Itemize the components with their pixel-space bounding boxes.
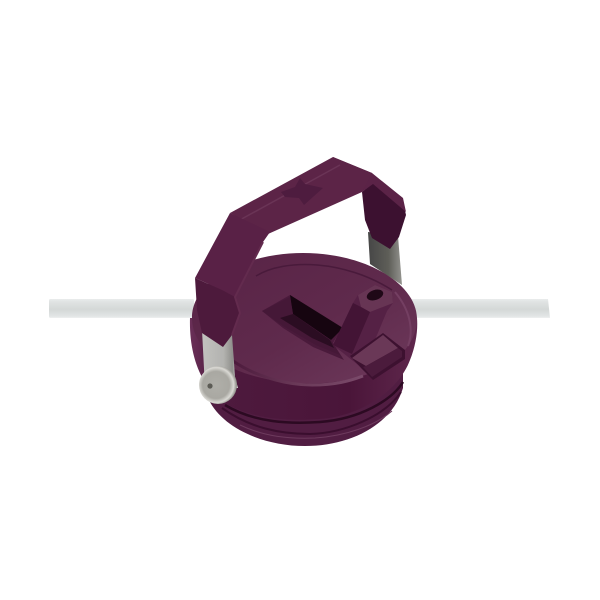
left metal strap: [202, 330, 238, 388]
lid side wall: [190, 318, 417, 423]
lid top face: [192, 253, 417, 385]
drink spout: [333, 285, 393, 368]
handle logo emboss: [281, 178, 323, 205]
handle top band: [230, 157, 372, 234]
pivot bolt: [199, 366, 237, 404]
straw opening slot: [262, 295, 344, 360]
handle left lower arm: [195, 278, 240, 347]
right metal strap: [368, 232, 402, 285]
carry handle: [195, 157, 406, 347]
straw left section: [49, 299, 194, 318]
lid assembly: [190, 157, 417, 446]
straw right section: [410, 299, 550, 318]
spout tab: [350, 333, 405, 380]
handle left upper arm: [195, 213, 270, 297]
spout hole: [365, 288, 385, 302]
threaded base: [209, 370, 403, 446]
handle right shoulder: [333, 157, 406, 212]
right handle tab: [362, 183, 406, 249]
